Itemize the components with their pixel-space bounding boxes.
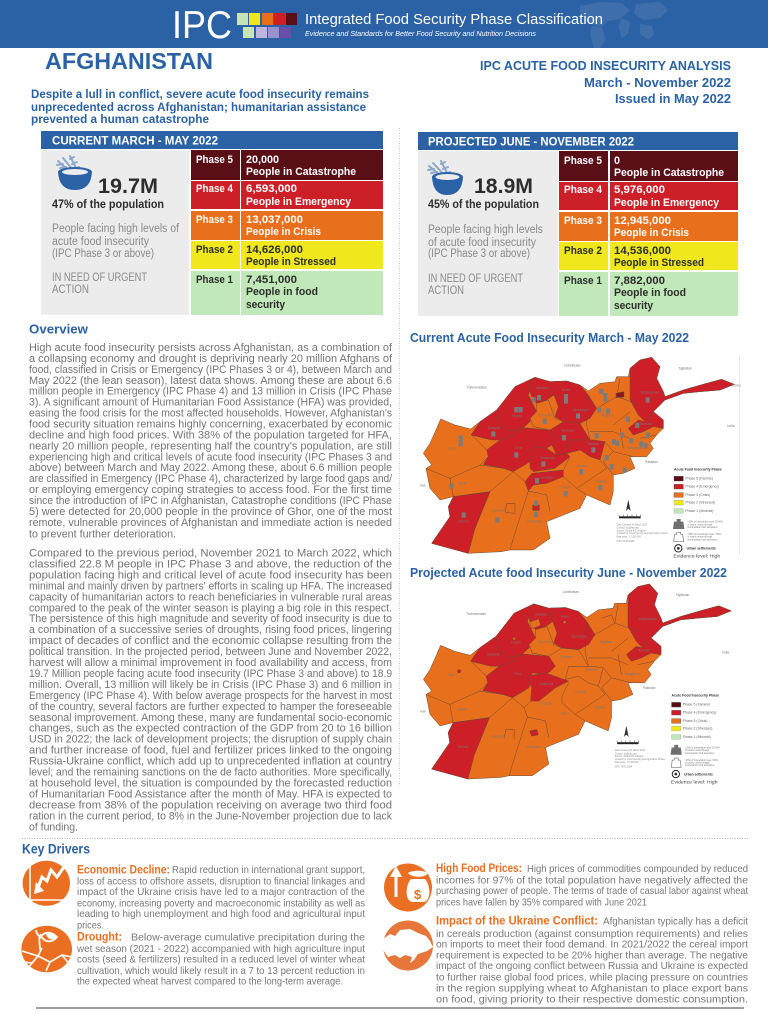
- phase 5 row: [191, 150, 383, 180]
- icon: wheat bowl: [428, 161, 463, 195]
- map labels: Paktika: [594, 705, 605, 709]
- phase 3 row: [559, 212, 738, 241]
- overview paragraph 1: experiencing high and critical levels of acute food insecurity (IPC Phases 3 and: [29, 451, 392, 463]
- overview paragraph 1: easing the food crisis for the most affected households. However, Afghanistan's: [29, 408, 392, 420]
- driver: economic decline: leading to high unemployment and high food and agricultural input: [77, 908, 365, 920]
- legend: Phase 4 (Emergency): [685, 485, 719, 489]
- legend: Phase 1 (Minimal): [685, 509, 713, 513]
- north arrow and scale: [617, 726, 639, 744]
- map labels: Sar-e-Pul: [538, 640, 552, 644]
- overview paragraph 2: and further increase of food, fuel and fertilizer prices linked to the ongoing: [29, 745, 392, 757]
- map labels: Daykundi: [541, 456, 555, 460]
- description: (IPC Phase 3 or above): [428, 248, 530, 260]
- description: People facing high levels: [428, 224, 543, 236]
- driver: impact of the Ukraine conflict: on food, giving priority to their respective domestic consumption.: [436, 993, 748, 1005]
- phase 3 province overlay: [529, 626, 562, 656]
- country base: [423, 584, 731, 779]
- analysis heading: March - November 2022: [584, 75, 731, 90]
- phase 3 row: Phase 3: [564, 215, 602, 227]
- driver: drought: costs (seed & fertilizers) resulted in a reduced level of winter wheat: [77, 954, 365, 966]
- driver: impact of the Ukraine conflict: to further raise global food prices, while placing pressure on countries: [436, 971, 748, 983]
- overview paragraph 1: a collapsing economy and drought is depriving nearly 20 million Afghans of: [29, 353, 393, 365]
- driver: high food prices: [436, 863, 748, 908]
- map labels: Nimroz: [458, 745, 469, 749]
- map labels: Paktika: [596, 479, 607, 483]
- legend: of caloric needs through: [685, 749, 710, 752]
- population share: 45% of the population: [428, 199, 539, 211]
- overview paragraph 2: changes, such as the expected contraction of the GDP from 20 to 16 billion: [29, 723, 392, 735]
- phase 1 row: People in food: [614, 287, 686, 299]
- legend: Phase 4 (Emergency): [683, 711, 716, 715]
- phase 1 row: security: [614, 300, 654, 312]
- map source notes: Date Created: 04 March 2022: [615, 749, 646, 752]
- legend: Phase 5 (Famine): [683, 703, 710, 707]
- description: of acute food insecurity: [428, 237, 536, 249]
- title: Afghanistan: AFGHANISTAN: [45, 48, 213, 74]
- legend: >25% of households meet 25-50%: [687, 521, 723, 524]
- subtitle: Despite a lull in conflict, severe acute food insecurity remains: [31, 87, 369, 101]
- map labels: Helmand: [491, 735, 505, 739]
- map labels: Daykundi: [540, 682, 554, 686]
- overview paragraph 1: or employing emergency coping strategies to access food. For the first time: [29, 484, 392, 496]
- map source notes: CRS: WGS 1984: [615, 767, 633, 769]
- overview paragraph 2: population facing high and critical level of acute food insecurity has been: [29, 569, 392, 581]
- analysis heading: Issued in May 2022: [615, 91, 731, 106]
- overview paragraph 2: decrease from 38% of the population receiving on average two third food: [29, 799, 392, 811]
- map labels: Bamyan: [562, 429, 574, 433]
- map source notes: Source: Global IPC Initiative: [615, 755, 644, 758]
- phase 3 province overlay: [530, 400, 563, 430]
- map labels: Jawzjan: [536, 386, 548, 390]
- north arrow and scale: [619, 500, 641, 518]
- overview paragraph 1: 3). A significant amount of Humanitarian Food Assistance (HFA) was provided,: [29, 397, 392, 409]
- country base: [423, 357, 734, 553]
- phase 2 row: People in Stressed: [614, 257, 704, 269]
- legend: Phase 5 (Famine): [685, 477, 713, 481]
- driver: high food prices: High prices of commodities compounded by reduced: [527, 863, 748, 875]
- map labels: Baghlan: [602, 414, 614, 418]
- phase 5 row: People in Catastrophe: [246, 166, 356, 178]
- map labels: Ghor: [515, 446, 523, 450]
- phase 4 row: 5,976,000: [614, 184, 665, 196]
- map source notes: Contact: ipc@fao.org: [617, 527, 639, 530]
- header banner: [0, 0, 768, 48]
- overview paragraph 2: million. Overall, 13 million will likely be in Crisis (IPC Phase 3) and 6 million in: [29, 679, 392, 691]
- driver: economic decline: loss of access to offshore assets, disruption to financial linkages and: [77, 876, 365, 888]
- overview paragraph 2: of funding.: [29, 821, 78, 833]
- map labels: Pakistan: [645, 460, 658, 464]
- overview paragraph 2: political transition. In the projected period, between June and November 2022,: [29, 646, 392, 658]
- legend: >25% of households meet >50%: [685, 759, 718, 762]
- map labels: Tajikistan: [678, 367, 692, 371]
- map labels: Balkh: [562, 388, 570, 392]
- subtitle: prevented a human catastrophe: [31, 112, 209, 126]
- legend: of caloric needs through: [687, 536, 713, 539]
- legend: Urban settlements: [684, 772, 713, 776]
- analysis heading: [480, 58, 731, 106]
- overview paragraph 2: minimal and mainly driven by partners' efforts in scaling up HFA. The increased: [29, 580, 392, 592]
- header title: Integrated Food Security Phase Classification: [305, 11, 603, 28]
- map labels: Nangarhar: [627, 446, 643, 450]
- phase 2 row: [191, 241, 383, 269]
- map labels: Pakistan: [643, 686, 656, 690]
- phase 5 row: Phase 5: [196, 154, 233, 166]
- map labels: Samangan: [571, 634, 587, 638]
- map labels: Uruzgan: [541, 475, 553, 479]
- heading: overview: Overview: [29, 322, 89, 336]
- map: projected acute food insecurity: [420, 584, 731, 784]
- overview paragraph 1: [29, 342, 393, 540]
- subtitle: unprecedented across Afghanistan; humanitarian assistance: [31, 100, 366, 114]
- map labels: Turkmenistan: [466, 612, 486, 616]
- phase 5 row: 0: [614, 155, 620, 167]
- map labels: Helmand: [492, 509, 505, 513]
- driver: impact of the Ukraine conflict: Impact of the Ukraine Conflict:: [436, 916, 598, 928]
- legend: Phase 2 (Stressed): [683, 727, 712, 731]
- driver: drought: [76, 932, 365, 988]
- overview paragraph 1: above) between March and May 2022. Among these, about 6.6 million people: [29, 462, 392, 474]
- heading: projected map: Projected Acute food Insecurity June - November 2022: [410, 565, 727, 580]
- map labels: Faryab: [511, 640, 521, 644]
- overview paragraph 2: seasonal improvement. Among these, many are fundamental socio-economic: [29, 712, 392, 724]
- phase 1 row: 7,451,000: [246, 274, 297, 286]
- phase 2 row: People in Stressed: [246, 256, 336, 268]
- map source notes: Source: Global IPC Initiative: [617, 529, 646, 532]
- phase 2 row: 14,626,000: [246, 244, 303, 256]
- panel heading: CURRENT MARCH - MAY 2022: [52, 134, 218, 148]
- phase 4 row: Phase 4: [196, 183, 234, 195]
- legend: >25% of households meet 25-50%: [685, 746, 720, 750]
- phase 4 row: People in Emergency: [246, 196, 352, 208]
- overview paragraph 1: since the introduction of IPC in Afghanistan, Catastrophe conditions (IPC Phase: [29, 495, 392, 507]
- driver: impact of the Ukraine conflict: in the region supplying wheat to Afghanistan to place export bans: [436, 982, 748, 994]
- driver: impact of the Ukraine conflict: impact of the ongoing conflict between Russia and Ukraine is expected: [436, 960, 748, 972]
- driver: high food prices: prices have fallen by 35% compared with June 2021: [436, 896, 647, 908]
- phase 5 row: Phase 5: [564, 155, 602, 167]
- legend: of caloric needs through: [687, 523, 713, 526]
- phase 4 row: 6,593,000: [246, 183, 297, 195]
- driver: impact of the Ukraine conflict: Afghanistan typically has a deficit: [603, 915, 748, 927]
- driver: economic decline: economy, increasing poverty and macroeconomic instability as well as: [77, 898, 365, 910]
- driver: impact of the Ukraine conflict: in cereals production (against consumption requirements) and relies: [436, 928, 748, 940]
- overview paragraph 2: 19.7 Million people facing acute food insecurity (IPC Phase 3 and above) to 18.9: [29, 668, 392, 680]
- overview paragraph 1: High acute food insecurity persists across Afghanistan, as a combination of: [29, 342, 393, 354]
- map labels: Ghazni: [575, 690, 586, 694]
- phase colour squares: [237, 13, 297, 38]
- phase 2 row: [559, 242, 738, 270]
- overview paragraph 2: harvest will allow a minimal improvement in food availability and access, from: [29, 657, 392, 669]
- phase 1 row: [559, 272, 738, 316]
- map labels: Zabul: [562, 485, 570, 489]
- overview paragraph 1: nearly 20 million people, representing half the country's population, are still: [29, 440, 392, 452]
- legend: Phase 1 (Minimal): [683, 735, 711, 739]
- map labels: Nimroz: [458, 519, 469, 523]
- driver: impact of the Ukraine conflict: on imports to meet their food demand. In 2021/2022 the cereal import: [436, 938, 748, 950]
- driver: drought: the expected wheat harvest compared to the long-term average.: [77, 976, 343, 988]
- map labels: Ghor: [514, 672, 522, 676]
- legend: Evidence level: High: [673, 554, 721, 559]
- legend: Evidence level: High: [671, 779, 718, 784]
- overview paragraph 1: 5) were detected for 20,000 people in the province of Ghor, one of the most: [29, 506, 392, 518]
- overview paragraph 2: a combination of a successive series of droughts, rising food prices, lingering: [29, 624, 392, 636]
- overview paragraph 2: capacity of humanitarian actors to reach beneficiaries in vulnerable rural areas: [29, 591, 392, 603]
- map labels: Ghazni: [577, 464, 587, 468]
- map source notes: Contact: ipc@fao.org: [615, 752, 637, 755]
- icon: economic decline: [23, 861, 70, 906]
- map labels: Kandahar: [527, 519, 543, 523]
- map labels: India: [727, 424, 735, 428]
- map labels: Wardak: [586, 668, 597, 672]
- description: IN NEED OF URGENT: [428, 273, 523, 285]
- driver: economic decline: impact of the Ukraine crisis have led to a major contraction of the: [77, 886, 365, 898]
- driver: impact of the Ukraine conflict: requirement is expected to be 20% higher than average. The negative: [436, 950, 748, 962]
- map labels: Wardak: [587, 442, 599, 446]
- overview paragraph 2: USD in 2022; the lack of development projects; the disruption of supply chain: [29, 734, 392, 746]
- map labels: Badghis: [488, 426, 500, 430]
- map labels: Balkh: [561, 614, 569, 618]
- population share: 47% of the population: [52, 199, 164, 211]
- phase 4 row: [559, 182, 738, 210]
- overview paragraph 1: food security situation remains highly concerning, exacerbated by economic: [29, 418, 392, 430]
- overview paragraph 2: level; and the remaining sanctions on the de facto authorities. More specifically,: [29, 766, 392, 778]
- legend: >25% of households meet >50%: [687, 533, 721, 536]
- subtitle: [31, 87, 369, 126]
- map labels: Hirat: [448, 673, 455, 677]
- IPC logo wordmark: IPC: [172, 4, 232, 47]
- overview paragraph 1: decline and high food prices. With 38% of the population targeted for HFA,: [29, 429, 392, 441]
- legend: humanitarian food assistance: [685, 764, 715, 767]
- province boundaries: [426, 605, 654, 776]
- map labels: Badakhshan: [641, 391, 659, 395]
- overview paragraph 2: impact of decades of conflict and the economic collapse resulting from the: [29, 635, 392, 647]
- map labels: Baghlan: [600, 640, 612, 644]
- food assistance icons: [449, 389, 650, 523]
- map labels: Uzbekistan: [563, 590, 579, 594]
- map source notes: [615, 749, 665, 769]
- phase 1 row: security: [246, 299, 286, 311]
- province boundaries: [426, 378, 657, 550]
- overview paragraph 2: of Humanitarian Food Assistance after the month of May. HFA is expected to: [29, 788, 392, 800]
- legend: Acute Food Insecurity Phase: [672, 694, 719, 698]
- map labels: Jawzjan: [535, 612, 547, 616]
- icon: Ukraine conflict: [383, 920, 433, 970]
- analysis heading: IPC ACUTE FOOD INSECURITY ANALYSIS: [480, 58, 731, 73]
- phase 1 row: Phase 1: [196, 274, 233, 286]
- overview paragraph 2: Compared to the previous period, November 2021 to March 2022, which: [29, 548, 392, 560]
- driver: economic decline: prices.: [77, 920, 104, 932]
- legend: [673, 468, 723, 559]
- map labels: [420, 364, 741, 523]
- map labels: Nuristan: [640, 422, 653, 426]
- headline figure: 19.7M: [98, 175, 158, 198]
- map labels: Nangarhar: [625, 672, 641, 676]
- map labels: Farah: [458, 481, 467, 485]
- icon: high food prices: $: [414, 887, 422, 902]
- phase 2 row: Phase 2: [564, 245, 602, 257]
- map source notes: Map scale: 1:7,500,000: [615, 762, 639, 764]
- legend: humanitarian food assistance: [687, 526, 718, 529]
- driver: drought: Drought:: [77, 932, 122, 944]
- panel heading: PROJECTED JUNE - NOVEMBER 2022: [428, 134, 634, 148]
- map labels: Bamyan: [561, 655, 573, 659]
- map source notes: CRS: WGS 1984: [617, 541, 635, 543]
- driver: drought: Below-average cumulative precipitation during the: [131, 932, 365, 944]
- map labels: Zabul: [560, 711, 569, 715]
- phase 1 row: People in food: [246, 286, 318, 298]
- description: IN NEED OF URGENT: [52, 272, 147, 284]
- phase 4 row: Phase 4: [564, 184, 603, 196]
- legend: Acute Food Insecurity Phase: [674, 468, 722, 472]
- phase 3 row: 12,945,000: [614, 215, 671, 227]
- map labels: Uruzgan: [540, 701, 552, 705]
- overview paragraph 1: May 2022 (the lean season), latest data shows. Among these are about 6.6: [29, 375, 392, 387]
- panel: projected June - November 2022: [418, 132, 738, 316]
- map labels: Hirat: [448, 447, 455, 451]
- map labels: Iran: [420, 483, 426, 487]
- driver: impact of the Ukraine conflict: [436, 915, 748, 1005]
- map source notes: Date Created: 04 March 2022: [617, 523, 648, 526]
- phase 2 row: Phase 2: [196, 244, 233, 256]
- description: ACTION: [428, 285, 464, 297]
- overview paragraph 2: classified 22.8 M people in IPC Phase 3 and above, the reduction of the: [29, 558, 392, 570]
- phase 3 row: People in Crisis: [246, 226, 321, 238]
- panel: current March - May 2022: [41, 131, 383, 315]
- driver: drought: cultivation, which would likely result in a 7 to 13 percent reduction in: [77, 965, 365, 977]
- icon: drought: [21, 926, 72, 972]
- map source notes: [617, 523, 668, 543]
- map labels: [420, 590, 729, 749]
- map labels: China: [732, 384, 741, 388]
- map labels: Farah: [458, 707, 467, 711]
- overview paragraph 2: ration in the current period, to 8% in the June-November projection due to lack: [29, 810, 392, 822]
- overview paragraph 1: to prevent further deterioration.: [29, 528, 176, 540]
- description: ACTION: [52, 284, 89, 296]
- map labels: Faryab: [512, 414, 522, 418]
- map markers: [513, 621, 566, 640]
- overview paragraph 2: The persistence of this high magnitude and severity of food insecurity is due to: [29, 613, 392, 625]
- phase 3 row: People in Crisis: [614, 227, 689, 239]
- legend: humanitarian food assistance: [687, 538, 718, 541]
- description: (IPC Phase 3 or above): [52, 248, 154, 260]
- headline figure: 18.9M: [474, 175, 533, 198]
- driver: economic decline: [77, 864, 365, 932]
- driver: economic decline: Economic Decline:: [77, 864, 170, 876]
- map labels: Iran: [420, 709, 426, 713]
- description: [428, 224, 543, 297]
- phase 3 row: Phase 3: [196, 214, 233, 226]
- map source notes: Map scale: 1:7,500,000: [617, 536, 642, 538]
- icon: high food prices: [384, 864, 432, 912]
- phase 2 row: 14,536,000: [614, 245, 671, 257]
- driver: drought: wet season (2021 - 2022) accompanied with high agriculture input: [76, 943, 365, 955]
- map labels: Tajikistan: [676, 593, 690, 597]
- legend: Phase 2 (Stressed): [685, 501, 715, 505]
- driver: high food prices: incomes for 97% of the total population have negatively affected the: [436, 874, 748, 886]
- phase 3 row: 13,037,000: [246, 214, 303, 226]
- legend: [671, 694, 720, 784]
- overview paragraph 2: Russia-Ukraine conflict, which add up to unprecedented inflation at country: [29, 756, 392, 768]
- map: current acute food insecurity: [420, 355, 741, 559]
- map labels: Badghis: [487, 652, 500, 656]
- map labels: Sar-e-Pul: [539, 414, 553, 418]
- overview paragraph 2: Emergency (IPC Phase 4). With below average prospects for the harvest in most: [29, 690, 392, 702]
- overview paragraph 2: of the country, several factors are further expected to hamper the foreseeable: [29, 701, 392, 713]
- overview paragraph 2: at household level, the situation is compounded by the forecasted reduction: [29, 778, 392, 790]
- overview paragraph 2: compared to the peak of the winter season is playing a big role in this respect.: [29, 602, 392, 614]
- map labels: Badakhshan: [639, 617, 657, 621]
- map labels: Kandahar: [526, 745, 542, 749]
- map source notes: Created by: Food Security and Agriculture Cluster: [617, 532, 668, 535]
- overview paragraph 1: food, classified in Crisis or Emergency (IPC Phases 3 or 4), between March and: [29, 364, 392, 376]
- phase 5 row: [559, 151, 738, 181]
- phase 4 provinces: [432, 357, 734, 553]
- legend: humanitarian food assistance: [685, 752, 715, 755]
- legend: Phase 3 (Crisis): [683, 719, 707, 723]
- phase 1 row: Phase 1: [564, 275, 602, 287]
- phase 5 row: People in Catastrophe: [614, 167, 724, 179]
- phase 4 row: [191, 181, 383, 209]
- phase 4 row: People in Emergency: [614, 197, 720, 209]
- driver: economic decline: Rapid reduction in international grant support,: [172, 864, 365, 876]
- map labels: Uzbekistan: [564, 364, 581, 368]
- header tagline: Evidence and Standards for Better Food Security and Nutrition Decisions: [305, 29, 536, 38]
- phase 1 row: 7,882,000: [614, 275, 665, 287]
- map labels: Turkmenistan: [467, 385, 487, 389]
- map labels: India: [722, 650, 729, 654]
- description: [52, 223, 180, 296]
- map labels: Nuristan: [638, 648, 650, 652]
- map labels: Samangan: [573, 408, 589, 412]
- overview paragraph 1: remote, vulnerable provinces of Afghanistan and immediate action is needed: [29, 517, 392, 529]
- overview paragraph 1: million people in Emergency (IPC Phase 4) and 13 million in Crisis (IPC Phase: [29, 386, 392, 398]
- overview paragraph 2: [29, 548, 392, 833]
- legend: of caloric needs through: [685, 761, 710, 764]
- phase 4 provinces: [432, 584, 731, 779]
- legend: Urban settlements: [687, 547, 716, 551]
- icon: wheat bowl: [57, 156, 92, 190]
- heading: key drivers: Key Drivers: [22, 840, 90, 856]
- heading: current map: Current Acute Food Insecurity March - May 2022: [410, 330, 689, 345]
- driver: high food prices: High Food Prices:: [436, 863, 522, 875]
- legend: Phase 3 (Crisis): [685, 493, 710, 497]
- overview paragraph 1: are classified in Emergency (IPC Phase 4), characterized by large food gaps and/: [29, 473, 393, 485]
- phase 5 row: 20,000: [246, 154, 279, 166]
- map source notes: Created by: Food Security and Agriculture Cluster: [615, 758, 665, 761]
- description: acute food insecurity: [52, 236, 149, 248]
- phase 3 row: [191, 211, 383, 240]
- phase 1 row: [191, 271, 383, 315]
- description: People facing high levels of: [52, 223, 180, 235]
